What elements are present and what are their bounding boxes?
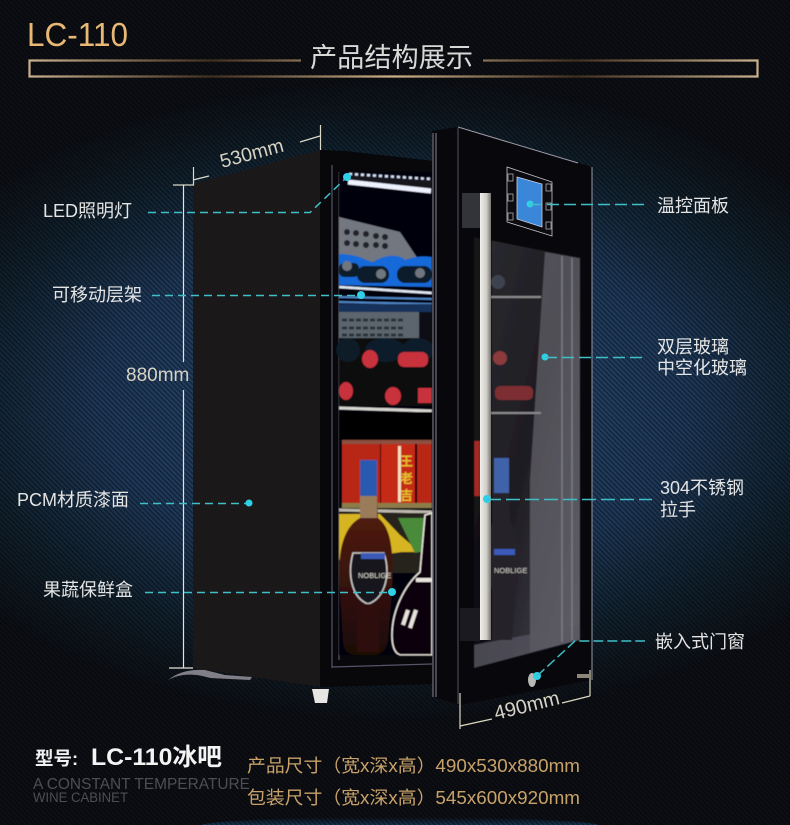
package size: 包装尺寸（宽x深x高）545x600x920mm xyxy=(247,788,580,808)
callout: embedded door xyxy=(533,632,745,680)
door xyxy=(432,127,592,705)
dimension: depth: 530mm xyxy=(218,135,286,173)
callout: PCM paint: PCM材质漆面 xyxy=(17,490,129,510)
english subtitle xyxy=(33,776,250,805)
control panel xyxy=(507,167,552,236)
red cans: 老 xyxy=(400,471,413,486)
callout: crisper: 果蔬保鲜盒 xyxy=(43,580,133,600)
callout: crisper xyxy=(43,580,396,600)
callout: steel handle: 304不锈钢 xyxy=(660,478,744,498)
dimension: height: 880mm xyxy=(126,365,189,386)
english subtitle: WINE CABINET xyxy=(33,790,128,805)
callout: double glass xyxy=(542,337,747,378)
model title: LC-110 xyxy=(27,16,128,53)
callout: movable shelf: 可移动层架 xyxy=(52,285,142,305)
red cans: 王 xyxy=(400,454,413,469)
model label: 型号: xyxy=(35,748,78,769)
door glass: NOBLIGE xyxy=(494,566,527,575)
dimension: depth xyxy=(173,125,320,185)
refrigerator xyxy=(168,127,592,705)
callout: LED light xyxy=(43,173,351,221)
blue bottles xyxy=(339,254,432,287)
movable shelf xyxy=(339,287,432,312)
callout: steel handle xyxy=(483,478,744,520)
back metal panel xyxy=(339,217,420,262)
dimension: width: 490mm xyxy=(492,687,562,725)
dimension: height xyxy=(126,185,193,668)
callout: movable shelf xyxy=(52,285,365,305)
model label xyxy=(35,744,222,771)
callout: double glass: 双层玻璃 xyxy=(657,337,729,357)
heading: 产品结构展示 xyxy=(310,43,473,73)
heading frame xyxy=(30,60,758,76)
callout: double glass: 中空化玻璃 xyxy=(657,358,747,378)
fruit box xyxy=(339,513,432,573)
liquor bottle xyxy=(339,460,393,655)
door glass xyxy=(474,237,580,668)
callout: control panel: 温控面板 xyxy=(657,196,729,216)
callout: control panel xyxy=(526,196,729,216)
LED light xyxy=(348,172,432,191)
wine bottles xyxy=(336,338,434,406)
callout: PCM paint xyxy=(17,490,252,510)
product size: 产品尺寸（宽x深x高）490x530x880mm xyxy=(247,756,580,776)
power cord and rear feet xyxy=(168,670,252,680)
lower shelf xyxy=(339,510,432,512)
callout: LED light: LED照明灯 xyxy=(43,201,132,221)
door lock xyxy=(528,673,536,687)
english subtitle: A CONSTANT TEMPERATURE xyxy=(33,776,250,793)
second bottle xyxy=(392,513,432,655)
front foot xyxy=(312,689,329,703)
callout: steel handle: 拉手 xyxy=(660,500,696,520)
cabinet side panel xyxy=(193,150,320,687)
dimension: width xyxy=(460,670,590,729)
back coil xyxy=(339,312,432,340)
red cans: 吉 xyxy=(400,488,413,503)
cabinet interior xyxy=(336,172,434,655)
handle xyxy=(460,193,491,641)
red cans xyxy=(342,440,432,508)
model label: LC-110冰吧 xyxy=(91,744,222,771)
liquor bottle: NOBLIGE xyxy=(358,571,391,580)
wire shelf xyxy=(339,408,432,411)
callout: embedded door: 嵌入式门窗 xyxy=(655,632,745,652)
cabinet front frame xyxy=(320,150,434,687)
